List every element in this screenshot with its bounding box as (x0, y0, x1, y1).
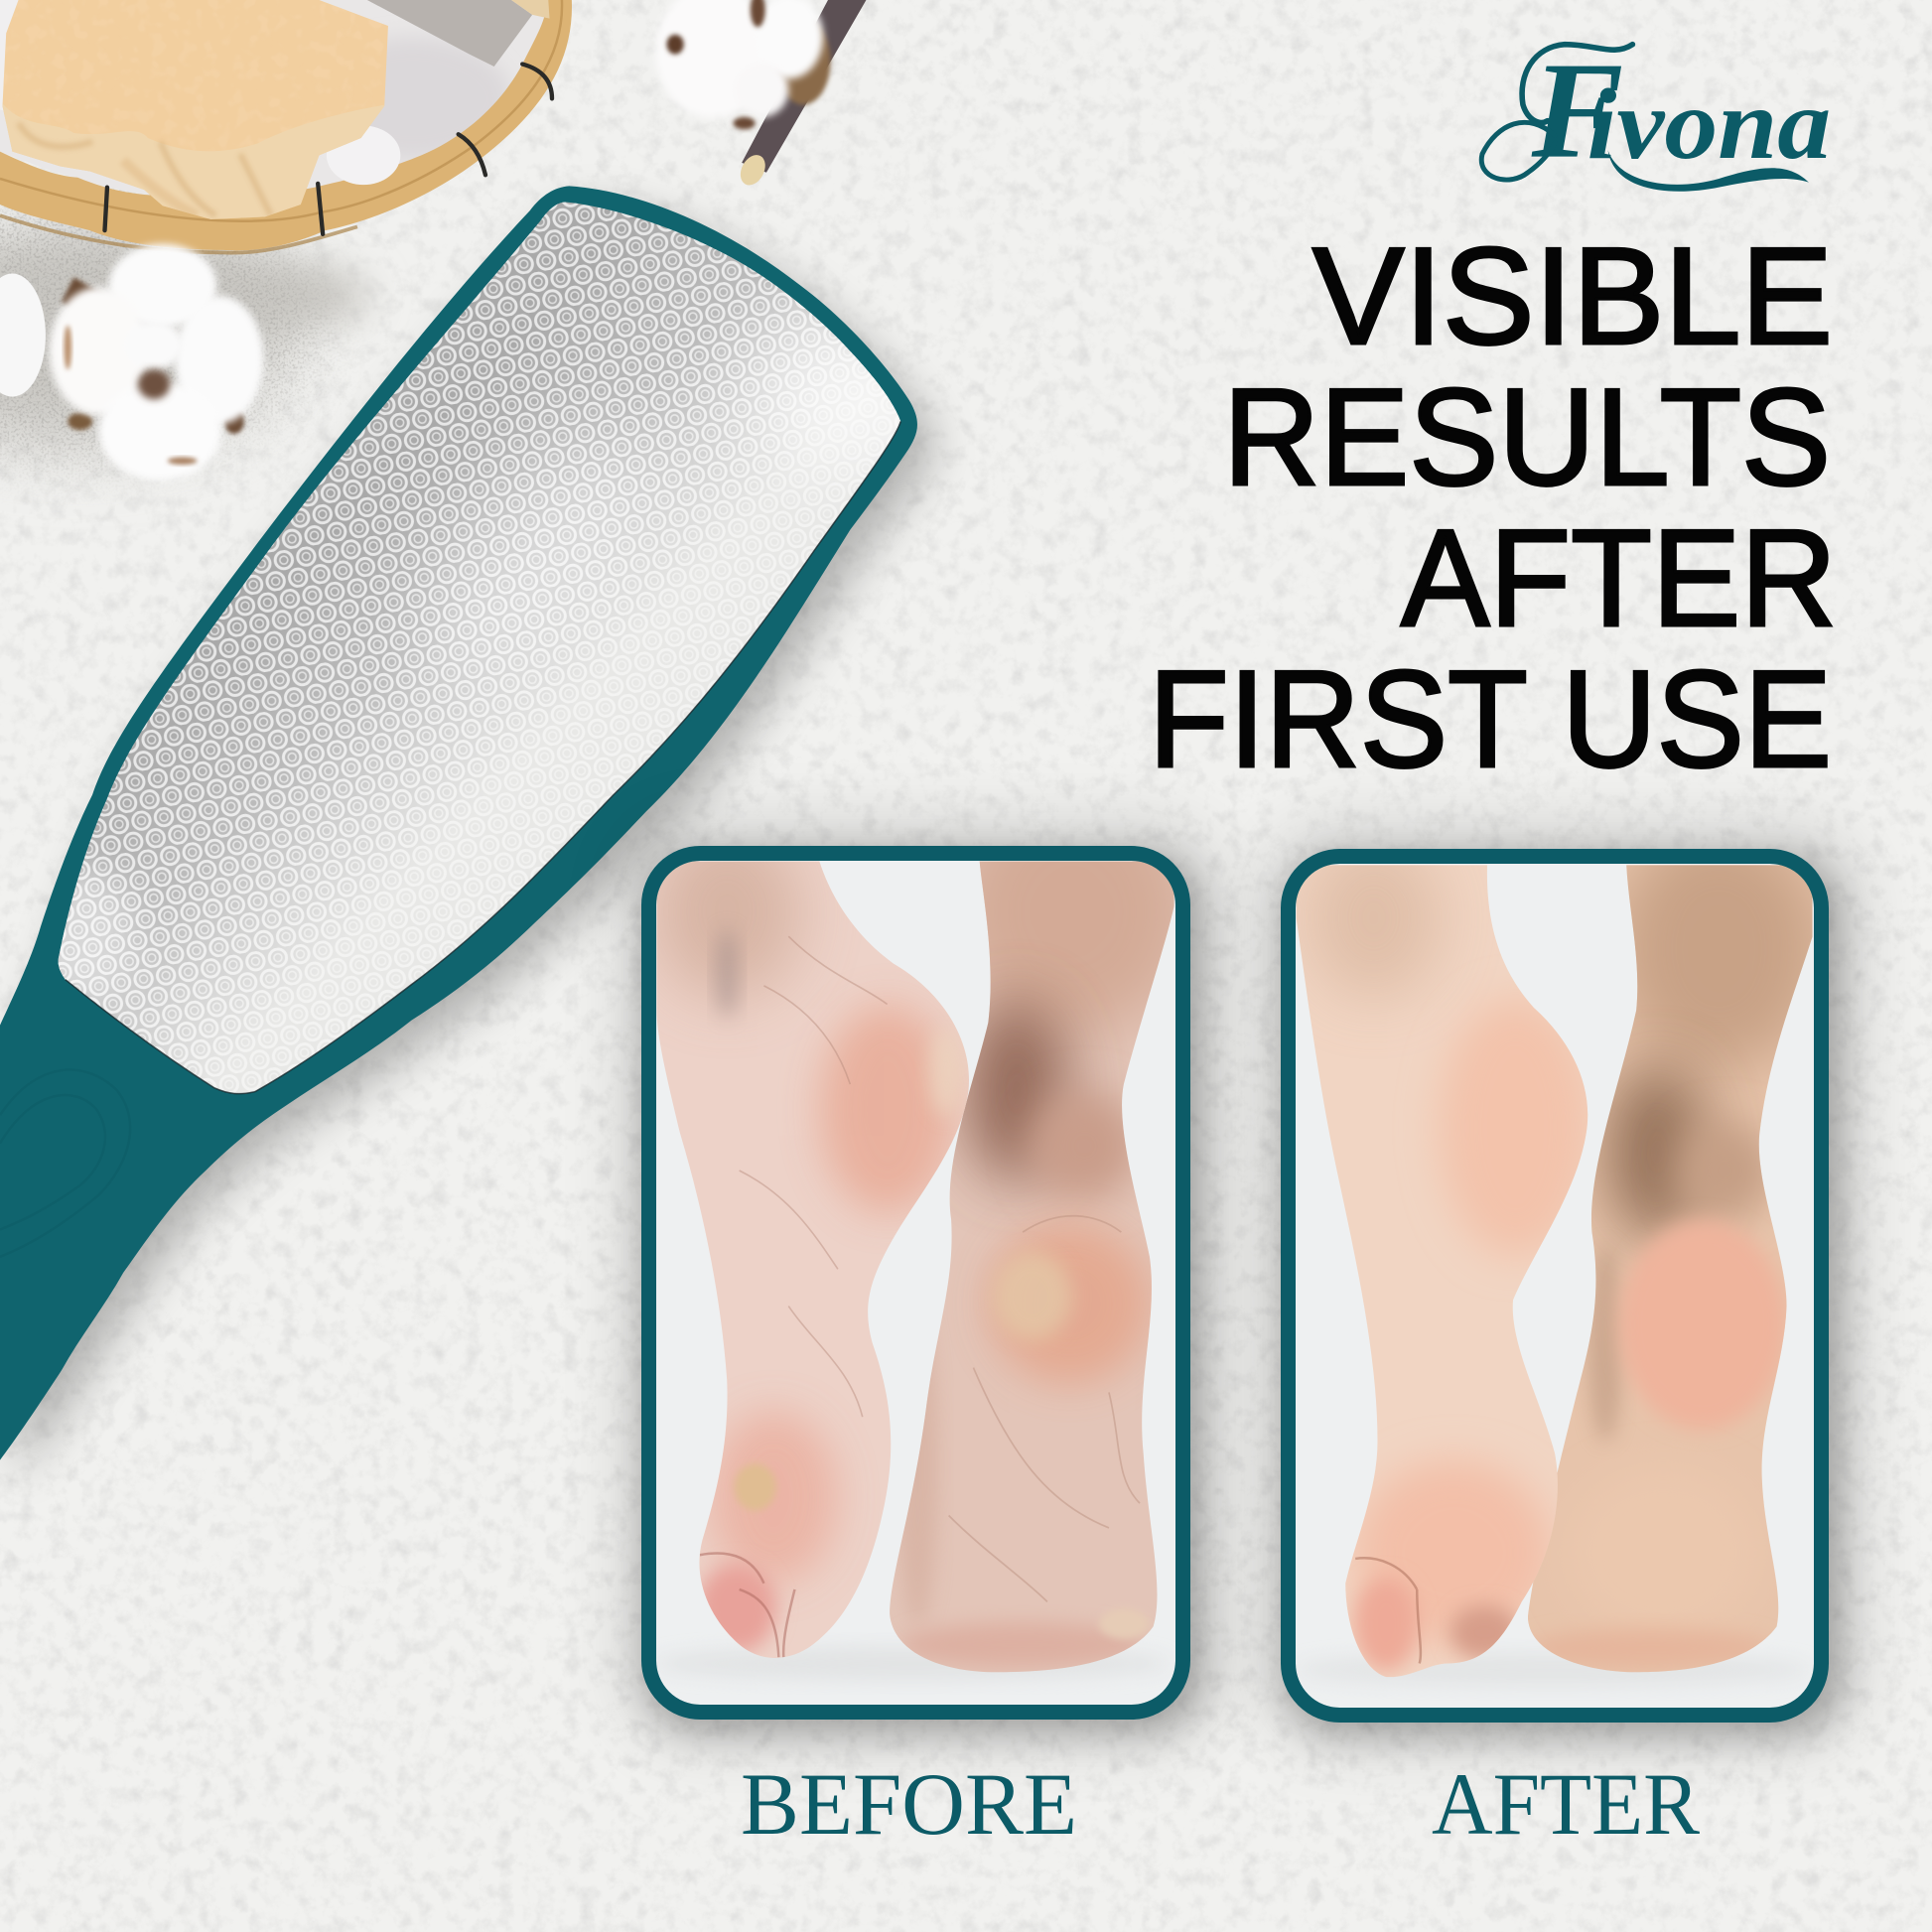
panel: after photo (1265, 826, 1861, 1745)
after frame (1289, 856, 1821, 1716)
metal plate with ring texture (58, 203, 901, 1094)
before frame (649, 854, 1183, 1712)
cotton boll left (0, 244, 264, 481)
label: after: AFTER (1432, 1756, 1701, 1854)
logo: Fivona (1481, 35, 1831, 192)
grey concrete surface (0, 185, 394, 505)
right foot before (890, 862, 1174, 1672)
heading: visible results after first use: FIRST USE (1149, 642, 1832, 796)
paddle shadow (17, 206, 934, 1480)
basket with soap (0, 0, 572, 253)
panel shadow (625, 824, 1221, 1742)
decorative scene: soap basket and cotton (0, 0, 866, 505)
heading: visible results after first use (1149, 219, 1837, 796)
label: before: BEFORE (741, 1756, 1077, 1854)
foot file paddle (0, 173, 949, 1480)
panel: before photo (625, 788, 1221, 1742)
logo swashes (1481, 45, 1632, 180)
stick (736, 0, 866, 190)
logo wordmark: ivona (1587, 69, 1831, 181)
paddle body (0, 186, 917, 1460)
left foot after (1288, 838, 1595, 1694)
heading: visible results after first use: RESULTS (1223, 360, 1831, 514)
logo wordmark: F (1531, 35, 1623, 188)
right foot after (1516, 826, 1824, 1694)
handle grip ridges (0, 1070, 130, 1257)
heading: visible results after first use: AFTER (1401, 501, 1837, 655)
cotton boll top (655, 0, 830, 129)
plate lower edge line (66, 421, 900, 1094)
heading: visible results after first use: VISIBLE (1312, 219, 1833, 373)
after photo (1296, 864, 1814, 1708)
basket rim (0, 0, 572, 250)
soap bar (2, 0, 388, 219)
before photo (656, 861, 1175, 1705)
panel shadow (1265, 827, 1861, 1745)
logo underline swoosh (1608, 150, 1809, 192)
white stones in basket (327, 126, 400, 185)
left foot before (657, 862, 969, 1658)
pumice stone (367, 0, 532, 67)
basket ties (104, 65, 552, 234)
